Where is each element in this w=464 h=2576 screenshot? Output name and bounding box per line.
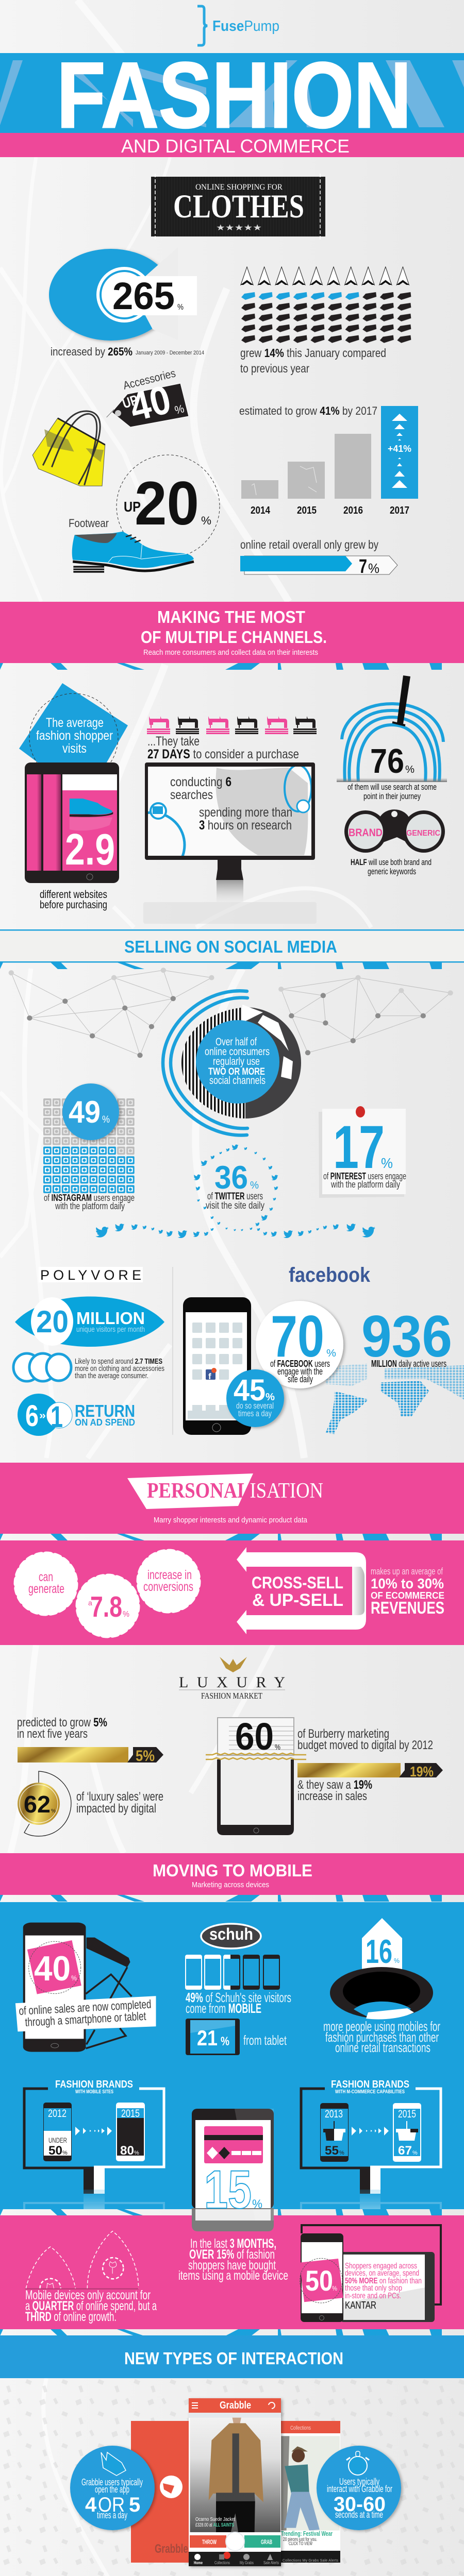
- icon grid: arrows and tags: grew 14% this January compared: [240, 346, 386, 360]
- panel: 16 percent pocket: %: [394, 1957, 400, 1964]
- bar chart: growth to 2017: 2016: [343, 505, 363, 516]
- icon: blue shoe: [72, 532, 194, 573]
- right screen: [281, 2421, 340, 2563]
- facebook map 936 million: 936: [361, 1304, 452, 1369]
- panel: search 76 percent: [337, 675, 447, 876]
- panel: personalisation stats: & UP-SELL: [252, 1590, 343, 1610]
- gear: increase in conversions: conversions: [143, 1580, 193, 1594]
- panel: sewing machines and monitor: ...They take: [147, 734, 200, 749]
- stat: online retail 7 percent: 7: [359, 556, 367, 578]
- heading: moving to mobile: [0, 1853, 464, 1895]
- clothes label: [151, 174, 325, 240]
- callout: 70 percent facebook users: of FACEBOOK users: [270, 1359, 330, 1369]
- heading: multiple channels: [0, 602, 464, 663]
- panel: twitter 36 percent: %: [250, 1180, 259, 1191]
- gear: increase in conversions: [140, 1553, 197, 1609]
- panel: personalisation stats: 10% to 30%: [371, 1575, 444, 1591]
- clothes label: ONLINE SHOPPING FOR: [195, 183, 283, 192]
- panel: pinterest note 17 percent: %: [381, 1155, 393, 1171]
- center screen: My Grabs: [240, 2561, 254, 2565]
- stat: burberry tablet 60 percent: increase in sales: [297, 1789, 367, 1803]
- heading: selling on social media: SELLING ON SOCIAL MEDIA: [124, 937, 337, 956]
- title banner: [0, 43, 464, 147]
- stat: 265 percent: increased by 265%: [51, 345, 132, 358]
- gear: 7.8 percent: 7.8: [90, 1590, 122, 1623]
- phone 2012: [43, 2103, 72, 2161]
- polyvore eye: 20 million: 20: [36, 1304, 69, 1339]
- icon grid: arrows and tags: to previous year: [240, 362, 309, 375]
- panel: schuh: [185, 1924, 291, 2055]
- callout: 70 percent facebook users: %: [326, 1348, 336, 1359]
- gear: can generate: generate: [28, 1582, 64, 1596]
- center screen: [189, 2398, 281, 2566]
- icon: dotted world map: [325, 1364, 464, 1434]
- stat: predicted to grow 5 percent: [17, 1716, 163, 1765]
- icon grid: arrows and tags: [240, 266, 413, 375]
- phone 2013: [320, 2103, 349, 2162]
- polyvore: 6 to 1 return: RETURN: [75, 1401, 135, 1420]
- center tablet: 15 percent: [192, 2109, 274, 2231]
- stat: 62 percent luxury sales: of ‘luxury sales’ were: [76, 1790, 163, 1804]
- center tablet: 15 percent: 15: [204, 2160, 252, 2220]
- stat: burberry tablet 60 percent: %: [275, 1743, 280, 1752]
- confetti texture behind grabble: [0, 2378, 464, 2576]
- callout: 45 percent: 45: [234, 1374, 266, 1407]
- clothes label: ★★★★★: [216, 224, 262, 232]
- phone 2015: 80: [120, 2144, 134, 2158]
- devices: kantar 50 percent: [300, 2225, 441, 2322]
- panel: 40 percent mobile sales: [15, 1923, 156, 2052]
- tab bar: [189, 2552, 281, 2566]
- panel: average shopper phones: fashion shopper: [36, 728, 113, 743]
- globe: over half of consumers: [163, 991, 301, 1135]
- callout: 30-60 seconds: 30-60: [334, 2493, 386, 2516]
- polyvore: 2.7 times: [13, 1353, 164, 1381]
- panel: search 76 percent: %: [405, 764, 415, 775]
- panel: average shopper phones: visits: [62, 741, 87, 756]
- panel: sewing machines and monitor: 27 DAYS to consider a purchase: [147, 747, 299, 761]
- heading: moving to mobile: Marketing across devices: [192, 1880, 269, 1889]
- panel: pink mobile section: In the last 3 MONTHS,: [190, 2236, 276, 2251]
- right screen: Collections My Grabs Sale Alerts: [283, 2559, 338, 2563]
- panel: pink mobile section: THIRD of online growth.: [25, 2310, 117, 2324]
- stat: online retail 7 percent: %: [368, 561, 379, 576]
- card: [204, 2126, 263, 2163]
- bar chart: growth to 2017: +41%: [388, 444, 411, 454]
- phone 2015: [393, 2103, 421, 2162]
- panel: twitter 36 percent: visit the site daily: [206, 1200, 264, 1211]
- callout: 4 or 5 times: times a day: [97, 2510, 127, 2520]
- center tablet: 15 percent: %: [252, 2197, 262, 2211]
- icon: phones row: [185, 1955, 280, 1990]
- panel: personalisation stats: CROSS-SELL: [252, 1573, 343, 1592]
- panel: pink mobile section: Mobile devices only account for: [25, 2288, 151, 2302]
- accessories tag and bag: Accessories: [122, 366, 177, 392]
- icon: binoculars: BRAND: [349, 827, 383, 839]
- globe: over half of consumers: Over half of: [216, 1036, 257, 1048]
- logo: luxury fashion market: LUXURY: [179, 1674, 285, 1691]
- stat: 62 percent luxury sales: %: [51, 1808, 56, 1814]
- stat: burberry tablet 60 percent: 60: [235, 1715, 274, 1758]
- panel: brands with mobile sites monitor: [24, 2079, 164, 2209]
- phone 2012: 2012: [48, 2108, 67, 2120]
- polyvore: 6 to 1 return: [18, 1394, 135, 1436]
- logo: luxury fashion market: FASHION MARKET: [201, 1691, 262, 1701]
- stat: 62 percent luxury sales: 62: [24, 1791, 51, 1818]
- panel: sewing machines and monitor: conducting 6: [170, 775, 231, 789]
- callout: 70 percent facebook users: [256, 1301, 343, 1388]
- panel: brands with mobile sites monitor: WITH MOBILE SITES: [75, 2089, 113, 2095]
- stat: burberry tablet 60 percent: of Burberry marketing: [297, 1727, 389, 1741]
- monitor: [143, 762, 317, 924]
- center screen: GRAB: [261, 2538, 272, 2546]
- callout: 30-60 seconds: seconds at a time: [335, 2510, 383, 2520]
- panel: grabble app: [70, 2398, 401, 2566]
- panel: sewing machines and monitor: searches: [170, 788, 213, 802]
- blue mobile section: [0, 1902, 464, 2209]
- icon: yellow bag: [32, 410, 114, 486]
- phone 2015: %: [134, 2150, 139, 2156]
- callout: 45 percent: %: [266, 1392, 275, 1403]
- facebook map 936 million: [325, 1304, 464, 1434]
- gear: can generate: can: [39, 1570, 53, 1584]
- callout: 70 percent facebook users: engage with the: [277, 1366, 323, 1377]
- right screen: Collections: [290, 2425, 311, 2431]
- panel: pink mobile section: shoppers have bought: [188, 2258, 276, 2273]
- heading: moving to mobile: MOVING TO MOBILE: [153, 1861, 312, 1880]
- callout: 30-60 seconds: Users typically: [339, 2477, 379, 2487]
- gear: 7.8 percent: a: [88, 1599, 92, 1607]
- panel: personalisation stats: REVENUES: [371, 1598, 444, 1617]
- panel: pink mobile section: a QUARTER of online spend, but a: [25, 2299, 157, 2313]
- logo: luxury fashion market: [179, 1657, 285, 1701]
- panel: 16 percent pocket: [323, 1918, 440, 2055]
- devices: kantar 50 percent: devices, on average, spend: [345, 2269, 419, 2278]
- heading: new types of interaction: NEW TYPES OF INTERACTION: [124, 2349, 343, 2368]
- panel: 40 percent mobile sales: 40: [34, 1949, 71, 1988]
- callout: 70 percent facebook users: 70: [271, 1304, 324, 1369]
- panel: pinterest note 17 percent: 17: [333, 1113, 385, 1181]
- icon: tablet 21 percent: %: [221, 2035, 229, 2048]
- stat: burberry tablet 60 percent: & they saw a 19%: [297, 1778, 372, 1792]
- callout: 45 percent: [226, 1369, 284, 1427]
- logo: polyvore: POLYVORE: [40, 1267, 141, 1283]
- panel: instagram 49 percent: with the platform daily: [55, 1201, 125, 1211]
- logo: FusePump top: FusePump: [212, 18, 279, 35]
- up 20 percent footwear: %: [201, 514, 211, 527]
- facebook phone: f: [208, 1371, 211, 1381]
- icon: binoculars: [344, 809, 445, 853]
- network decoration: [9, 968, 453, 1058]
- up 20 percent footwear: UP: [124, 499, 141, 515]
- panel: schuh: from tablet: [243, 2032, 287, 2048]
- heading: personalisation: [0, 1463, 464, 1534]
- panel: personalisation stats: [0, 1540, 464, 1645]
- stat: 265 percent: %: [177, 303, 184, 312]
- panel: 40 percent mobile sales: %: [71, 1974, 77, 1982]
- devices: kantar 50 percent: %: [332, 2284, 337, 2292]
- panel: instagram 49 percent: %: [102, 1114, 110, 1125]
- accessories tag and bag: %: [173, 402, 186, 417]
- gear: increase in conversions: increase in: [147, 1568, 192, 1582]
- gear: 7.8 percent: %: [123, 1610, 129, 1619]
- panel: pink mobile section: OVER 15% of fashion: [189, 2247, 275, 2262]
- globe: over half of consumers: TWO OR MORE: [208, 1066, 265, 1077]
- arrows: [75, 2127, 112, 2136]
- panel: twitter 36 percent: [95, 1145, 375, 1238]
- bar chart: growth to 2017: 2015: [297, 505, 317, 516]
- phone 2015: 2015: [398, 2108, 416, 2120]
- phone 2015: %: [412, 2150, 418, 2156]
- panel: schuh: 49% of Schuh's site visitors: [186, 1990, 291, 2005]
- heading: multiple channels: MAKING THE MOST: [157, 607, 305, 626]
- phone 2012: UNDER: [48, 2136, 67, 2144]
- stat: online retail 7 percent: online retail overall only grew by: [240, 538, 378, 551]
- devices: kantar 50 percent: those that only shop: [345, 2284, 402, 2293]
- panel: average shopper phones: The average: [46, 716, 104, 730]
- icon: tablet 21 percent: [186, 2019, 240, 2055]
- phone 2015: 67: [398, 2144, 412, 2158]
- icon: tablet 21 percent: 21: [197, 2026, 218, 2050]
- panel: twitter 36 percent: of TWITTER users: [207, 1191, 263, 1202]
- polyvore eye: 20 million: MILLION: [76, 1309, 145, 1328]
- panel: brands with m-commerce monitor: WITH M-COMMERCE CAPABILITIES: [335, 2089, 405, 2095]
- bar chart: growth to 2017: 2017: [390, 505, 409, 516]
- callout: 45 percent: times a day: [238, 1409, 272, 1418]
- arrows: [352, 2127, 389, 2136]
- center screen: £328.00 at ALL SAINTS: [195, 2522, 234, 2528]
- panel: search 76 percent: HALF will use both brand and: [351, 857, 432, 867]
- logo: facebook: facebook: [289, 1264, 371, 1286]
- icon: shoe on phone: [70, 799, 113, 831]
- stat: 265 percent: 265: [112, 275, 175, 317]
- callout: 70 percent facebook users: site daily: [288, 1374, 313, 1384]
- up 20 percent footwear: 20: [135, 469, 199, 538]
- polyvore: 6 to 1 return: 6: [25, 1399, 39, 1433]
- accessories tag and bag: 40: [125, 376, 175, 430]
- stat: online retail 7 percent: [240, 538, 397, 578]
- buttons: [190, 2535, 226, 2548]
- panel: sewing machines and monitor: 3 hours on research: [199, 818, 292, 833]
- callout: 4 or 5 times: 4: [85, 2494, 97, 2516]
- phone 2012: 50: [48, 2144, 62, 2158]
- phone 2015: 2015: [121, 2108, 140, 2120]
- polyvore: 2.7 times: Likely to spend around 2.7 TIMES: [75, 1358, 162, 1366]
- center screen: Ocarno Suede Jacket: [195, 2517, 235, 2522]
- callout: 4 or 5 times: open the app: [95, 2484, 129, 2495]
- phone 2015: [116, 2103, 145, 2161]
- stat: predicted to grow 5 percent: in next five years: [17, 1727, 88, 1741]
- icon: cat ears: [25, 2231, 139, 2289]
- subtitle band: AND DIGITAL COMMERCE: [121, 135, 350, 157]
- callout: 30-60 seconds: interact with Grabble for: [327, 2484, 392, 2494]
- icon: bird loop: [95, 1145, 375, 1238]
- polyvore: 6 to 1 return: 1: [51, 1400, 63, 1434]
- callout: 4 or 5 times: Grabble users typically: [81, 2477, 143, 2487]
- left screen: [131, 2421, 189, 2563]
- panel: pinterest note 17 percent: with the platform daily: [330, 1179, 400, 1190]
- bar chart: growth to 2017: 2014: [251, 505, 271, 516]
- gear: 7.8 percent: [78, 1576, 138, 1636]
- panel: brands with m-commerce monitor: FASHION BRANDS: [331, 2079, 409, 2090]
- stat: predicted to grow 5 percent: predicted to grow 5%: [17, 1716, 107, 1730]
- panel: instagram 49 percent: of INSTAGRAM users engage: [44, 1193, 135, 1203]
- heading: new types of interaction: [0, 2335, 464, 2378]
- callout: 4 or 5 times: [70, 2446, 155, 2530]
- title: FASHION: FASHION: [57, 43, 411, 147]
- polyvore: 6 to 1 return: »: [39, 1410, 46, 1421]
- callout: 4 or 5 times: 5: [129, 2494, 140, 2516]
- polyvore eye: 20 million: [15, 1296, 164, 1347]
- polyvore: 6 to 1 return: ON AD SPEND: [75, 1417, 135, 1428]
- subtitle band: [0, 133, 464, 157]
- devices: kantar 50 percent: 50% MORE on fashion than: [345, 2277, 422, 2285]
- panel: pinterest note 17 percent: of PINTEREST users engage: [323, 1171, 406, 1181]
- center screen: THROW: [202, 2538, 217, 2546]
- jacket photo: [190, 2418, 280, 2532]
- panel: pink mobile section: [0, 2215, 464, 2329]
- phones: 2.9: [65, 825, 115, 874]
- panel: sewing machines and monitor: spending more than: [199, 805, 292, 820]
- panel: instagram 49 percent: 49: [69, 1095, 101, 1129]
- panel: 40 percent mobile sales: of online sales are now completed: [19, 1997, 152, 2018]
- center screen: Grabble: [220, 2400, 251, 2411]
- facebook phone: [183, 1297, 251, 1435]
- panel: schuh: come from MOBILE: [186, 2001, 261, 2016]
- right screen: CLICK TO VIEW: [289, 2541, 312, 2546]
- phone 2013: 2013: [325, 2108, 343, 2120]
- panel: twitter 36 percent: 36: [214, 1160, 248, 1196]
- globe: over half of consumers: social channels: [209, 1075, 266, 1087]
- gear: can generate: [18, 1555, 74, 1612]
- heading: selling on social media: [0, 929, 464, 962]
- polyvore: 2.7 times: than the average consumer.: [75, 1372, 148, 1380]
- stat: 265 percent: January 2009 - December 2014: [136, 350, 204, 356]
- panel: schuh: schuh: [209, 1925, 253, 1943]
- globe: over half of consumers: regularly use: [213, 1056, 260, 1067]
- heading: personalisation: PERSONALISATION: [147, 1479, 323, 1503]
- bar chart: growth to 2017: [239, 404, 418, 516]
- polyvore: 2.7 times: more on clothing and accessories: [75, 1365, 164, 1373]
- panel: personalisation stats: OF ECOMMERCE: [371, 1590, 444, 1601]
- accessories tag and bag: UP: [121, 392, 140, 412]
- stat: burberry tablet 60 percent: [206, 1715, 443, 1835]
- icon: sewing machines: [147, 716, 317, 734]
- ribbon arrow: [237, 1547, 366, 1634]
- up 20 percent footwear: Footwear: [69, 517, 109, 530]
- devices: kantar 50 percent: Shoppers engaged across: [345, 2262, 417, 2270]
- phone 2013: 55: [325, 2144, 339, 2158]
- panel: 40 percent mobile sales: through a smartphone or tablet: [25, 2009, 146, 2029]
- panel: search 76 percent: 76: [370, 742, 404, 781]
- panel: brands with mobile sites monitor: FASHION BRANDS: [55, 2079, 133, 2090]
- panel: pink mobile section: items using a mobile device: [178, 2268, 288, 2283]
- panel: average shopper phones: [19, 683, 128, 911]
- center screen: Sale Alerts: [263, 2561, 279, 2565]
- stat: 62 percent luxury sales: impacted by digital: [76, 1802, 156, 1816]
- panel: brands with m-commerce monitor: [301, 2079, 441, 2209]
- logo: FusePump top: [197, 6, 279, 45]
- devices: kantar 50 percent: 50: [305, 2264, 333, 2297]
- right screen: 20 pieces just for you.: [283, 2537, 317, 2543]
- panel: search 76 percent: point in their journey: [363, 791, 421, 801]
- left screen: Grabble: [155, 2542, 188, 2556]
- polyvore eye: 20 million: unique visitors per month: [76, 1325, 145, 1334]
- stat: predicted to grow 5 percent: 5%: [136, 1748, 155, 1765]
- panel: average shopper phones: before purchasing: [40, 899, 107, 911]
- stat: 62 percent luxury sales: [18, 1771, 163, 1836]
- accessories tag and bag: [32, 366, 189, 486]
- heading: multiple channels: OF MULTIPLE CHANNELS.: [141, 628, 327, 647]
- panel: average shopper phones: different websites: [40, 889, 107, 901]
- globe: over half of consumers: online consumers: [205, 1046, 270, 1058]
- up 20 percent footwear: [69, 455, 220, 573]
- stat: burberry tablet 60 percent: 19%: [410, 1764, 434, 1780]
- bar chart: growth to 2017: estimated to grow 41% by 2017: [239, 404, 377, 417]
- callout: 45 percent: do so several: [236, 1401, 274, 1411]
- devices: kantar 50 percent: in-store and on PCs.: [345, 2292, 401, 2300]
- panel: pinterest note 17 percent: [319, 1106, 406, 1198]
- phones: [25, 762, 119, 883]
- stat: 265 percent: [49, 247, 204, 358]
- right screen: Trending: Festival Wear: [281, 2530, 333, 2537]
- clothes label: CLOTHES: [173, 188, 304, 225]
- panel: 16 percent pocket: 16: [366, 1933, 392, 1970]
- center screen: Collections: [214, 2561, 230, 2565]
- center screen: Home: [194, 2561, 203, 2565]
- phone 2012: %: [62, 2150, 68, 2156]
- devices: kantar 50 percent: KANTAR: [345, 2300, 376, 2311]
- phone 2013: %: [339, 2150, 344, 2156]
- heading: multiple channels: Reach more consumers and collect data on their interests: [143, 648, 318, 657]
- heading: personalisation: Marry shopper interests and dynamic product data: [154, 1516, 308, 1524]
- callout: 4 or 5 times: OR: [98, 2494, 125, 2516]
- icon: binoculars: GENERIC: [406, 829, 440, 838]
- panel: search 76 percent: generic keywords: [368, 867, 416, 876]
- panel: sewing machines and monitor: [143, 716, 317, 924]
- callout: 30-60 seconds: [317, 2446, 401, 2530]
- panel: instagram 49 percent: [43, 1083, 136, 1211]
